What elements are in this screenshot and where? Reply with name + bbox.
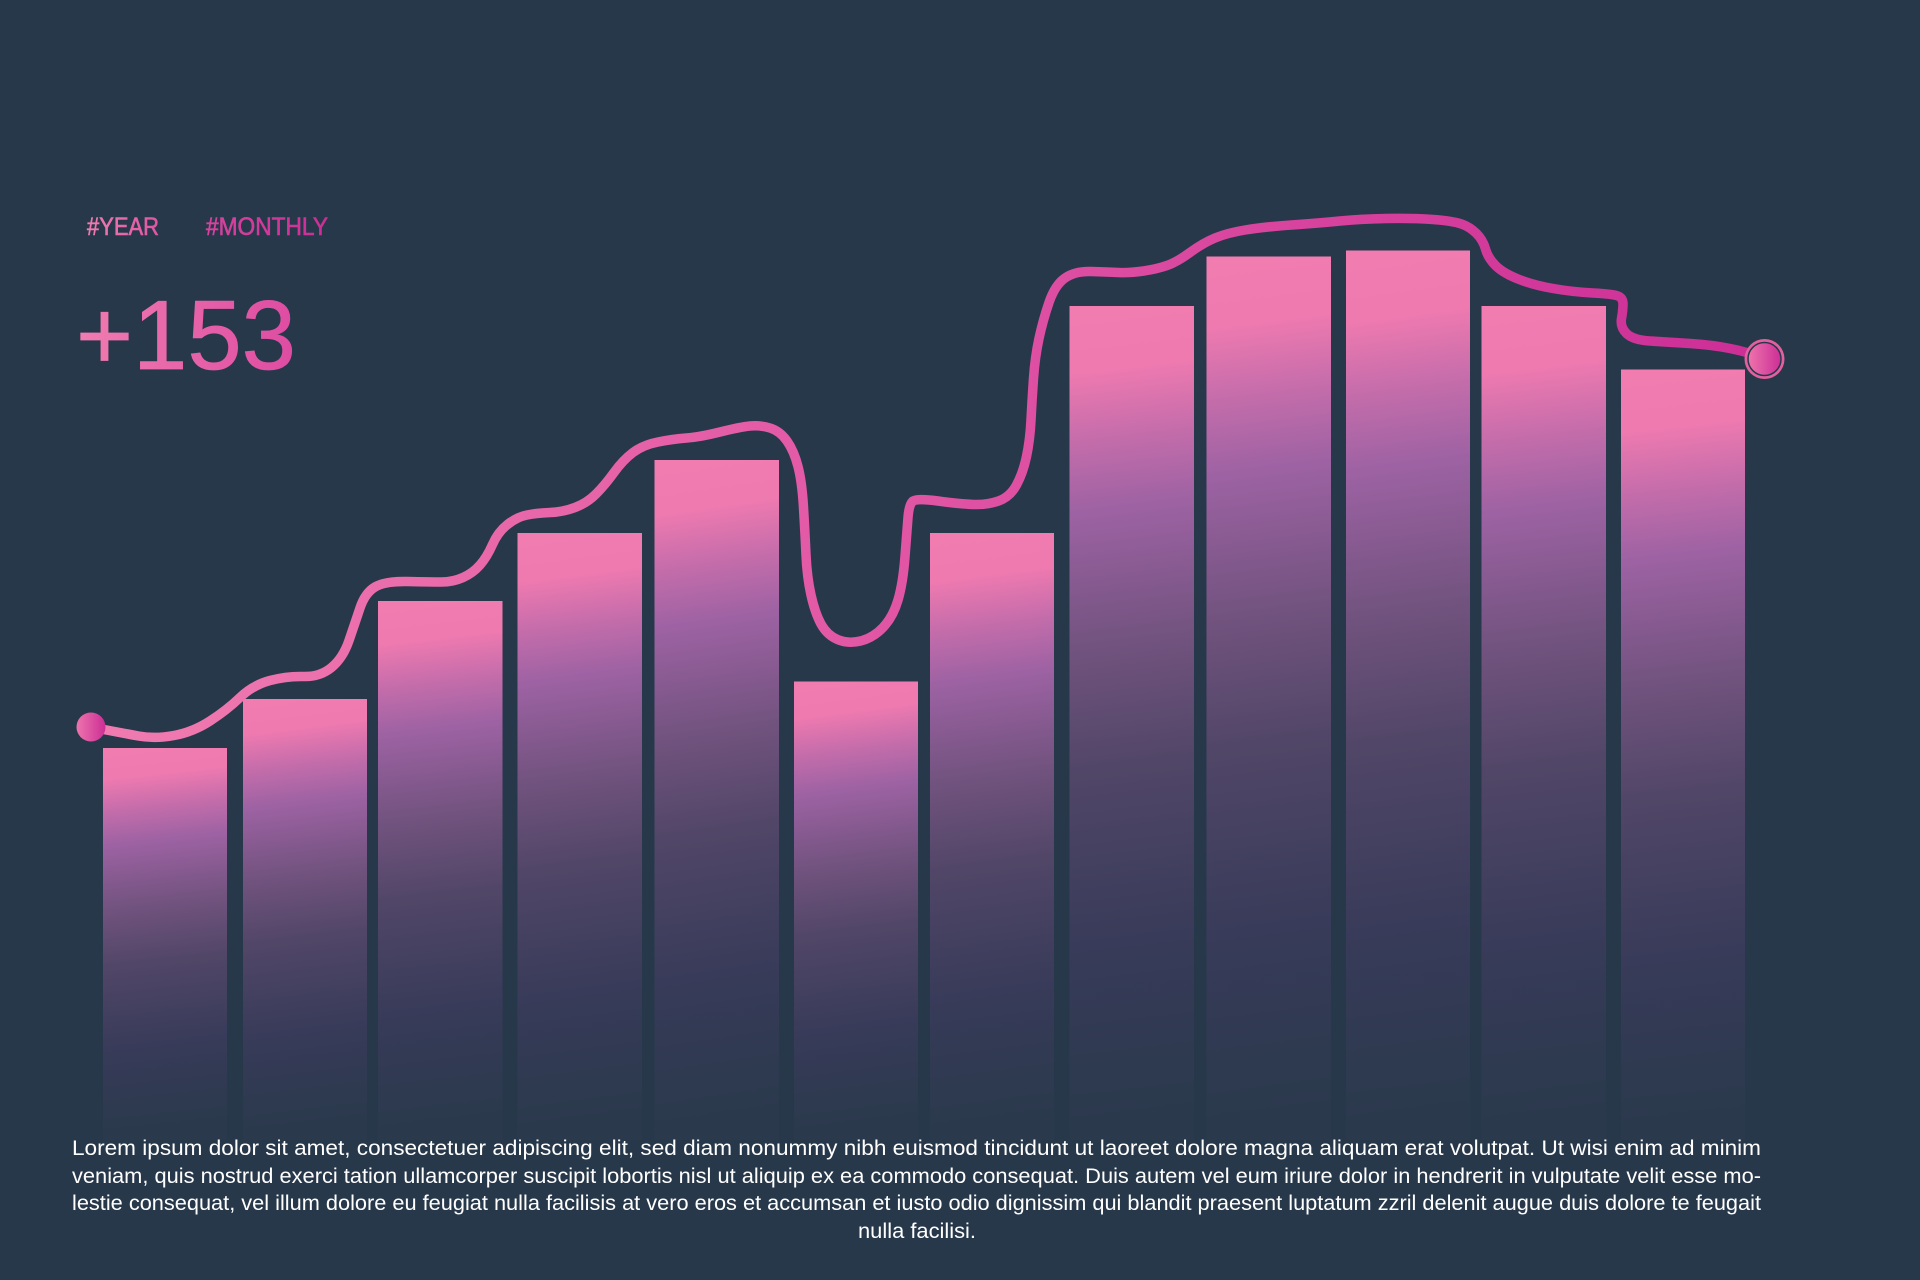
bar 3 xyxy=(378,601,502,1140)
bar 4 xyxy=(518,533,642,1140)
tag: year: #YEAR xyxy=(87,213,159,241)
trend line xyxy=(91,218,1764,737)
bar 12 xyxy=(1621,370,1745,1140)
bar 10 xyxy=(1346,250,1470,1140)
bar 8 xyxy=(1070,306,1194,1140)
text line 1: Lorem ipsum dolor sit amet, consectetuer adipiscing elit, sed diam nonummy nibh euismod tincidunt ut laoreet dolore magna aliquam erat volutpat. Ut wisi enim ad minim xyxy=(72,1136,1761,1160)
bar 7 xyxy=(930,533,1054,1140)
bar 6 xyxy=(794,682,918,1140)
bar 11 xyxy=(1482,306,1606,1140)
bar 1 xyxy=(103,748,227,1140)
bar 9 xyxy=(1206,256,1331,1140)
text line 4: nulla facilisi. xyxy=(858,1219,976,1243)
bar 2 xyxy=(243,699,367,1140)
body text xyxy=(72,1136,1761,1243)
bar 5 xyxy=(654,460,779,1140)
bar chart xyxy=(103,250,1745,1140)
headline number: +153 xyxy=(76,280,296,390)
start dot xyxy=(76,712,106,742)
hashtag labels xyxy=(87,213,328,241)
end dot xyxy=(1744,339,1784,379)
text line 3: lestie consequat, vel illum dolore eu feugiat nulla facilisis at vero eros et accumsan et iusto odio dignissim qui blandit praesent luptatum zzril delenit augue duis dolore te feugait xyxy=(72,1191,1761,1215)
tag: monthly: #MONTHLY xyxy=(206,213,328,241)
text line 2: veniam, quis nostrud exerci tation ullamcorper suscipit lobortis nisl ut aliquip ex ea commodo consequat. Duis autem vel eum iriure dolor in hendrerit in vulputate velit esse mo- xyxy=(72,1164,1761,1188)
